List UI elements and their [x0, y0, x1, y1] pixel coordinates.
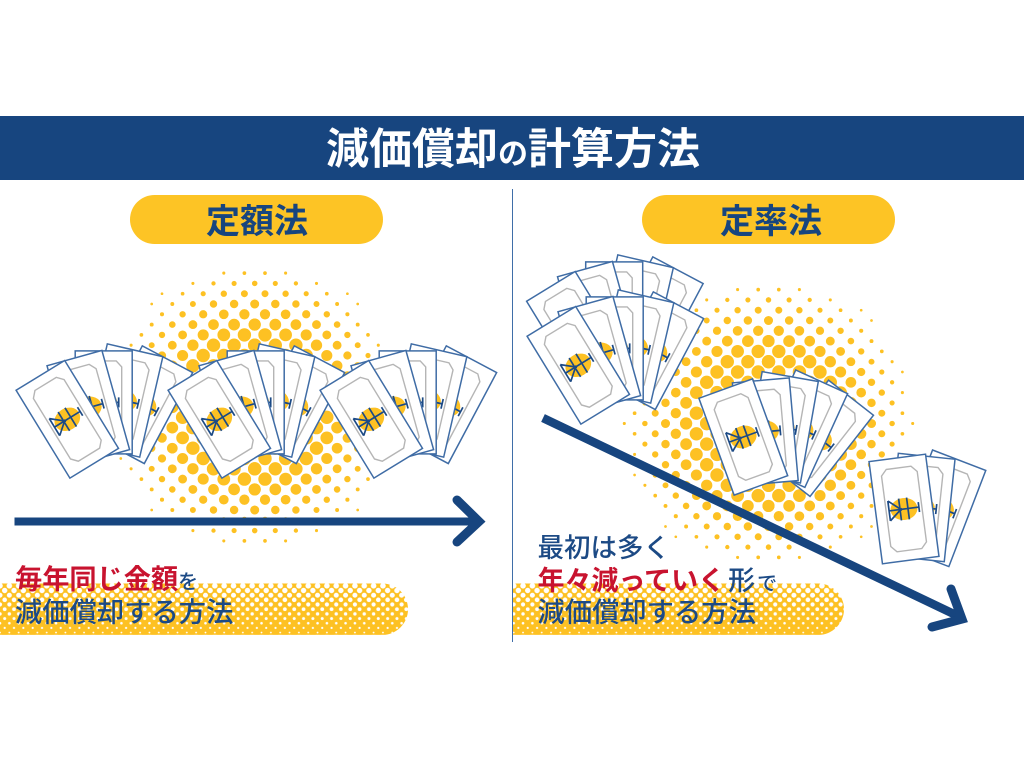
highlight bar [0, 584, 408, 635]
description text [538, 533, 777, 628]
heading pill: 定率法 [642, 195, 895, 244]
description text: 毎年同じ金額を [15, 564, 198, 594]
banknote fan: large stack front [527, 290, 704, 424]
description text [15, 564, 233, 628]
description text: 減価償却する方法 [538, 596, 756, 628]
heading pill: 定額法: 定額法 [206, 203, 308, 241]
title banner: 減価償却の計算方法 [326, 126, 700, 174]
panel: declining-balance method [513, 195, 986, 635]
arrow: declining [543, 418, 962, 627]
heading pill: 定額法 [130, 195, 383, 244]
description text: 年々減っていく形で [538, 566, 777, 596]
heading pill: 定率法: 定率法 [720, 203, 822, 241]
halftone background [110, 272, 400, 542]
banknote fan: small stack [869, 450, 986, 567]
banknote fan: medium stack [699, 370, 873, 496]
panel: straight-line method [0, 195, 497, 635]
banknote fan: large stack back [527, 255, 703, 389]
arrow: flat horizontal [14, 500, 479, 542]
center divider [512, 189, 513, 642]
title banner [0, 116, 1024, 180]
halftone background [624, 289, 913, 558]
description text: 最初は多く [538, 533, 670, 563]
banknote fans: three equal stacks [16, 344, 497, 478]
description text: 減価償却する方法 [15, 596, 233, 628]
highlight bar [513, 584, 844, 635]
